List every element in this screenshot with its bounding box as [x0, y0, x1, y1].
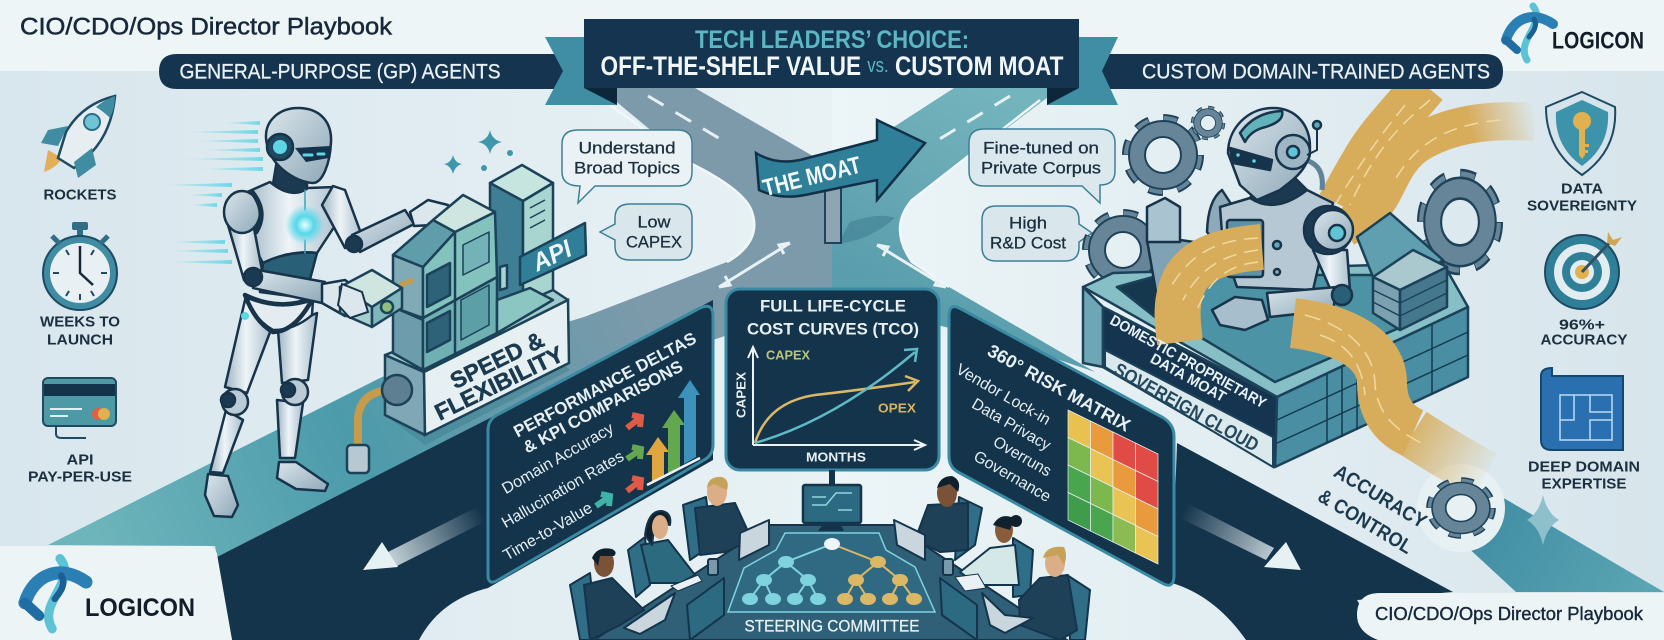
left icon: credit card: [43, 378, 116, 438]
speech bubble: understand broad topics: Understand: [578, 138, 676, 158]
boardroom table: [594, 525, 1067, 640]
speech bubble: low capex: Low: [638, 212, 671, 232]
chart labels: MONTHS: [806, 450, 866, 464]
label: weeks to launch: WEEKS TO: [40, 314, 120, 330]
plaque text: SPEED &: [446, 326, 548, 394]
title line 2: OFF-THE-SHELF VALUE vs. CUSTOM MOAT: [600, 51, 1064, 81]
right icon: target: [1545, 232, 1622, 309]
delta arrows: [596, 415, 641, 506]
org tree: gold: [832, 544, 921, 604]
label: data sovereignty: SOVEREIGNTY: [1527, 198, 1637, 214]
left attendee two: [628, 511, 718, 597]
accuracy and control caption: [1314, 461, 1431, 559]
label: data sovereignty: [1527, 180, 1637, 214]
title banner: [545, 19, 1118, 105]
right icon: blueprint: [1541, 368, 1623, 450]
api connector sign: [520, 223, 586, 285]
double arrow: left to sign: [719, 243, 790, 287]
label: api pay-per-use: PAY-PER-USE: [28, 468, 132, 486]
opex curve: [755, 349, 917, 443]
kpi rows: Time-to-Value: [500, 500, 596, 564]
speech bubble: high r&d cost: High: [1009, 214, 1047, 232]
raised left arm and block: [1147, 240, 1222, 315]
label: 96%+ accuracy: [1540, 316, 1628, 348]
data ribbons behind robot: [1335, 85, 1535, 228]
api label: API: [527, 234, 577, 278]
chart labels: CAPEX: [766, 348, 810, 362]
label: weeks to launch: [40, 314, 120, 348]
risk labels: Governance: [971, 448, 1054, 506]
robot head: [266, 108, 331, 183]
panel heading: 360° RISK MATRIX: [984, 340, 1134, 436]
panel heading: PERFORMANCE DELTAS: [510, 329, 700, 441]
top-left playbook title: CIO/CDO/Ops Director Playbook: [20, 14, 393, 40]
speech bubble: high r&d cost: [982, 206, 1092, 261]
monitor: [803, 470, 861, 531]
arch block: [1357, 213, 1443, 290]
arrow: left road direction: [363, 507, 484, 570]
robot legs: [205, 295, 328, 517]
robot body: [1220, 190, 1333, 290]
speech bubble: low capex: [600, 204, 692, 260]
road: dark lower lanes: [217, 300, 1664, 640]
robot hand on cube: [338, 284, 368, 318]
label: deep domain expertise: [1528, 458, 1640, 492]
chart labels: CAPEX: [734, 372, 748, 418]
table outline: [728, 533, 935, 612]
accuracy and control caption: & CONTROL: [1314, 485, 1416, 559]
panel: life-cycle cost curves: [726, 289, 939, 470]
banner: general-purpose agents: [159, 54, 570, 89]
kpi rows: Domain Accuracy: [499, 420, 617, 498]
rising bars: [646, 380, 700, 485]
icon: accuracy gear: [1432, 482, 1490, 534]
platform left cap: [1083, 287, 1103, 367]
left icon: stopwatch: [43, 222, 117, 310]
risk labels: Vendor Lock-in: [953, 361, 1053, 429]
heat map: [1068, 410, 1158, 564]
robot neck: [272, 160, 307, 199]
logo icon: [25, 559, 86, 629]
panel: performance deltas: [488, 306, 713, 582]
accuracy and control caption: ACCURACY: [1330, 461, 1431, 534]
org tree: cyan: [743, 544, 832, 604]
label: data sovereignty: DATA: [1561, 180, 1603, 198]
banner: custom domain-trained agents: [1095, 54, 1503, 89]
data ribbons in front of robot: [1172, 238, 1485, 476]
left attendee one: [683, 477, 769, 560]
sovereign cloud strip and platform labels: [1105, 312, 1273, 467]
right attendee two: [943, 515, 1033, 597]
panel heading: & KPI COMPARISONS: [520, 357, 686, 457]
label: weeks to launch: LAUNCH: [47, 332, 113, 348]
risk labels: Data Privacy: [969, 396, 1053, 454]
modular server stack: [340, 165, 586, 473]
label: data moat: DATA MOAT: [1147, 350, 1229, 406]
upper block: [393, 255, 423, 318]
pipe and base: [358, 390, 390, 447]
panel heading: COST CURVES (TCO): [747, 320, 919, 338]
panel: bottom-right playbook: [1357, 593, 1664, 640]
title line 1: TECH LEADERS’ CHOICE:: [695, 26, 969, 54]
steering committee scene: [570, 470, 1090, 640]
moat signpost: [756, 120, 925, 243]
robot arms: [224, 186, 452, 316]
label: deep domain expertise: EXPERTISE: [1542, 476, 1626, 492]
general-purpose robot: [205, 108, 452, 517]
tall server tower: [490, 165, 553, 201]
left icon: rocket: [41, 96, 115, 178]
upper arm, shoulder, forearm: [1313, 250, 1350, 295]
label: rockets: ROCKETS: [44, 186, 116, 204]
panel: bottom-left logo: [0, 546, 232, 640]
speech bubble: understand broad topics: [562, 130, 692, 203]
panel: risk matrix: [949, 307, 1174, 585]
gears around custom robot: [1089, 109, 1496, 284]
label: 96%+ accuracy: ACCURACY: [1540, 332, 1628, 348]
data moat platform: [1083, 213, 1468, 467]
steering committee label: STEERING COMMITTEE: [744, 616, 920, 636]
rack server: [1373, 250, 1447, 290]
speed and flexibility plaque: [424, 300, 569, 435]
playbook text: CIO/CDO/Ops Director Playbook: [1375, 604, 1644, 624]
banner: custom domain-trained agents: CUSTOM DOMAIN-TRAINED AGENTS: [1142, 60, 1490, 84]
platform top rim: [1083, 263, 1468, 397]
label: domestic proprietary: DOMESTIC PROPRIETARY: [1107, 312, 1269, 412]
plaque text: FLEXIBILITY: [430, 341, 568, 425]
right icon: shield and key: [1546, 92, 1615, 175]
label: deep domain expertise: DEEP DOMAIN: [1528, 458, 1640, 476]
speech bubble: fine-tuned: Private Corpus: [981, 158, 1101, 178]
robot head: [1228, 108, 1310, 200]
lower block: [393, 307, 423, 370]
custom domain robot: [1147, 108, 1353, 330]
arrow: right road direction: [1180, 503, 1301, 570]
chart axes: [748, 347, 925, 450]
top-right logo: [1506, 6, 1644, 60]
capex curve: [755, 376, 918, 443]
speech bubble: high r&d cost: R&D Cost: [990, 234, 1066, 252]
label: 96%+ accuracy: 96%+: [1559, 316, 1605, 334]
label: sovereign cloud: SOVEREIGN CLOUD: [1110, 360, 1262, 456]
shoulder back: [1207, 190, 1235, 250]
right attendee three: [940, 547, 1090, 640]
server stack base shadow: [385, 345, 570, 445]
speech bubble: fine-tuned: [969, 129, 1115, 203]
speed lines: [160, 121, 263, 264]
speech bubble: low capex: CAPEX: [626, 232, 682, 252]
banner: general-purpose agents: GENERAL-PURPOSE (GP) AGENTS: [180, 60, 500, 84]
kpi rows: [499, 420, 627, 564]
double arrow: sign to right: [877, 245, 946, 287]
road: right teal branch: [832, 88, 1095, 372]
robot torso and chest light: [245, 182, 342, 298]
risk labels: Overruns: [990, 434, 1054, 480]
moat label: THE MOAT: [760, 152, 864, 202]
platform right face: [1275, 307, 1468, 467]
road: left grey branch and teal strip: [48, 88, 832, 557]
speech bubble: understand broad topics: Broad Topics: [574, 158, 680, 178]
panel heading: [747, 296, 919, 338]
top-right logo: LOGICON: [1552, 28, 1644, 54]
chart labels: [734, 348, 916, 464]
left attendee three: [570, 548, 724, 640]
risk labels: [953, 361, 1054, 506]
right attendee one: [894, 476, 982, 560]
windows: [427, 263, 450, 307]
label: api pay-per-use: API: [66, 452, 94, 468]
platform front face: [1103, 307, 1277, 467]
held cube: [340, 270, 402, 307]
logo text: LOGICON: [85, 594, 195, 622]
kpi rows: Hallucination Rates: [499, 448, 627, 532]
speech bubble: fine-tuned: Fine-tuned on: [983, 138, 1099, 158]
chart labels: OPEX: [878, 400, 916, 416]
panel heading: FULL LIFE-CYCLE: [760, 296, 906, 316]
label: api pay-per-use: [28, 452, 132, 486]
sparkles: [444, 130, 513, 174]
